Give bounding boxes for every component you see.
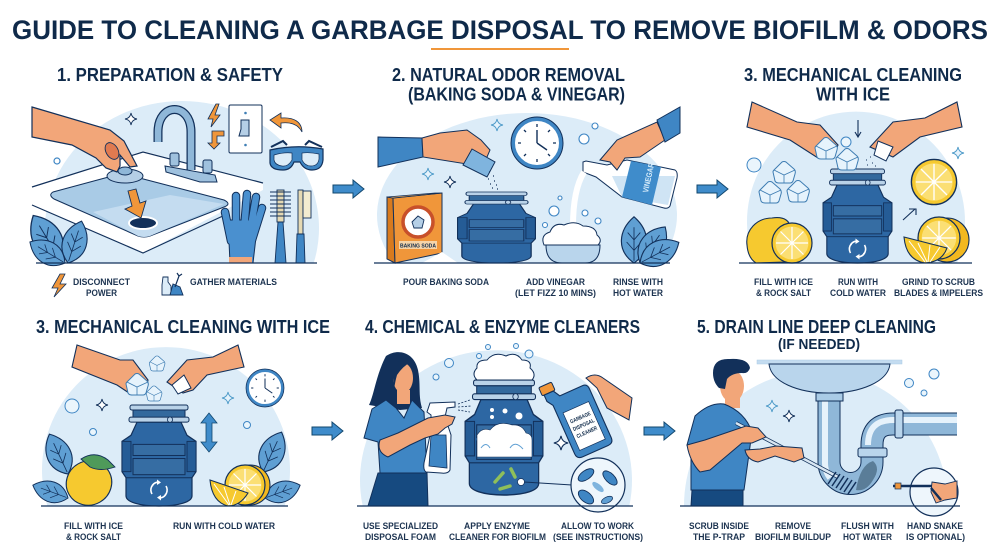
caption: add vinegar [515,276,596,298]
sink basin [757,360,902,393]
small bubbles [54,158,60,164]
vinegar bottle [583,160,677,208]
connector line [524,482,572,485]
caption: fill with ice [64,520,123,542]
caption: scrub [689,520,749,542]
bubbles [433,344,533,380]
lemon slice large [911,159,957,205]
brush [736,423,856,494]
rubber glove [225,194,262,263]
cleaner jug [539,369,614,462]
drain pipes [816,393,957,490]
falling ice [146,356,165,401]
clock [511,117,563,169]
sparkles [96,392,234,411]
bubbles [747,137,851,172]
down arrow [855,120,861,137]
caption: disconnect power [52,274,130,298]
disposal unit [122,405,196,506]
right hand with salt [870,102,962,161]
caption: fill with ice: & ROCK SALT [66,531,121,542]
caption: apply enzyme [449,520,546,542]
background blob [377,113,677,263]
heading: step 3 [744,65,962,104]
caption: grind: GRIND TO SCRUB [902,276,975,287]
sparkle [952,147,964,159]
caption: pour baking soda: POUR BAKING SODA [403,276,489,287]
caption: rinse: RINSE WITH [613,276,663,287]
heading: step 2: 2. NATURAL ODOR REMOVAL [392,65,625,85]
right hand holding bottle [600,107,680,170]
caption: hand snake: HAND SNAKE [907,520,963,531]
basin lower shade [93,195,224,237]
heading: step 4: 4. CHEMICAL & ENZYME CLEANERS [365,317,640,337]
background blob [747,112,965,263]
heading: step 2: (BAKING SODA & VINEGAR) [408,84,625,104]
right hand with salt [167,345,244,394]
baking soda box: BAKING SODA [400,244,436,250]
vinegar stream [573,172,584,226]
caption: add vinegar: (LET FIZZ 10 MINS) [515,287,596,298]
caption: allow to work: ALLOW TO WORK [561,520,634,531]
heading: 3. MECHANICAL CLEANING WITH ICE [36,317,330,337]
caption: fill with ice: & ROCK SALT [756,287,811,298]
caption: use foam: USE SPECIALIZED [363,520,438,531]
panel: 1 preparation and safety [21,65,323,298]
ground line [374,262,670,264]
arrow: step 1 to 2 [333,180,364,198]
heading: step 5: (IF NEEDED) [778,336,860,353]
ground line [357,505,633,507]
icon: down arrow [208,131,224,149]
up-right arrow [903,209,916,220]
man arms [687,426,804,472]
hand holding jug [586,375,632,420]
caption: fill with ice: FILL WITH ICE [754,276,813,287]
ground line [680,505,960,507]
caption: scrub: SCRUB INSIDE [689,520,749,531]
falling salt [866,157,876,166]
sparkle [125,113,137,125]
arrow: step 3 to 4 [312,422,343,440]
title: GUIDE TO CLEANING A GARBAGE DISPOSAL TO REMOVE BIOFILM & ODORS [12,15,988,45]
woman figure [364,352,428,506]
caption: gather materials [162,273,277,295]
disposal with foam [465,380,543,495]
caption: allow to work [553,520,643,542]
panel: second step 3 mechanical cleaning [29,317,330,542]
ground line [41,505,288,507]
background blob [45,101,319,263]
heading: step 5 [697,317,936,353]
caption: apply enzyme: APPLY ENZYME [464,520,530,531]
caption: run with cold water: RUN WITH COLD WATER [173,520,275,531]
panel: 5 drain line deep cleaning [680,317,965,542]
leaves [21,208,93,273]
ice cubes [759,148,858,203]
caption: use foam: DISPOSAL FOAM [365,531,436,542]
cleaner jug: DISPOSAL [572,418,596,433]
sparkles [422,119,503,188]
lemons right [904,217,969,263]
heading: step 3: 3. MECHANICAL CLEANING [744,65,962,85]
sparkle [554,436,568,450]
sink outline [32,152,263,253]
caption: add vinegar: ADD VINEGAR [526,276,585,287]
left leaves [29,429,79,508]
caption: hand snake [906,520,965,542]
sink counter [32,151,263,253]
ground line [36,262,317,264]
heading: step 1: 1. PREPARATION & SAFETY [57,65,283,85]
lemon cut [210,465,270,506]
caption: disconnect power: POWER [86,287,117,298]
left hand pouring soda [378,130,495,177]
faucet [158,110,217,182]
bubbles [904,369,939,396]
caption: flush: HOT WATER [843,531,892,542]
left hand with ice [747,102,838,159]
magnifier with bacteria [571,458,625,512]
caption: use foam [363,520,438,542]
double arrow [201,413,217,452]
lemons left [747,218,812,263]
foam on top [474,354,534,380]
background blob [684,371,948,506]
caption: run with cold water: COLD WATER [830,287,886,298]
heading: step 3: WITH ICE [816,84,890,104]
caption: rinse [613,276,663,298]
arrow: step 2 to 3 [697,180,728,198]
caption: remove: BIOFILM BUILDUP [755,531,831,542]
caption: flush [841,520,894,542]
bubbles [65,399,250,436]
caption: rinse: HOT WATER [613,287,663,298]
caption: fill with ice [754,276,813,298]
falling powder [488,172,498,189]
caption: remove [755,520,831,542]
caption: grind: BLADES & IMPELERS [894,287,983,298]
right leaves [252,427,304,508]
spray bottle [424,400,471,473]
disposal unit [823,169,892,263]
caption: flush: FLUSH WITH [841,520,894,531]
heading: step 2 [392,65,625,104]
clock [246,369,284,407]
background blob [42,347,290,506]
bubbles [542,123,601,228]
caption: fill with ice: FILL WITH ICE [64,520,123,531]
caption: gather materials: GATHER MATERIALS [190,276,277,287]
man figure [687,359,752,506]
caption: apply enzyme: CLEANER FOR BIOFILM [449,531,546,542]
sink basin [51,174,228,237]
stopper [107,167,143,183]
caption: remove: REMOVE [775,520,811,531]
icon: lightning bolt [208,104,220,127]
arrow into drain [125,189,146,218]
hand on stopper [32,107,137,172]
foam bowl [543,223,600,263]
caption: run with cold water [830,276,886,298]
drain hole [129,217,157,229]
cleaner jug: CLEANER [576,426,598,440]
sparkles [766,400,795,422]
caption: disconnect power: DISCONNECT [73,276,130,287]
title accent rule [431,48,569,50]
caption: grind [894,276,983,298]
safety goggles [270,141,323,170]
caption: scrub: THE P-TRAP [693,531,745,542]
curved orange arrow [270,113,302,132]
vinegar bottle: VINEGAR [641,162,656,193]
left hand with ice [72,345,148,395]
ground line [739,262,972,264]
wall switch [229,105,262,153]
panel: 4 chemical and enzyme cleaners [357,317,643,542]
baking soda box [387,193,458,263]
lemon whole [58,452,120,514]
leaves [621,217,684,274]
magnifier with hand snake [893,468,958,516]
caption: hand snake: IS OPTIONAL) [906,531,965,542]
panel: 3 mechanical cleaning with ice [739,65,983,298]
cleaning brushes [270,190,311,263]
panel: 2 natural odor removal [374,65,684,298]
arrow: step 4 to 5 [644,422,675,440]
cleaner jug: GARBAGE [569,411,592,425]
background blob [360,350,632,506]
woman arm holding spray [379,415,455,457]
disposal unit [458,192,535,263]
caption: run with cold water: RUN WITH [838,276,878,287]
caption: allow to work: (SEE INSTRUCTIONS) [553,531,643,542]
heading: step 5: 5. DRAIN LINE DEEP CLEANING [697,317,936,337]
